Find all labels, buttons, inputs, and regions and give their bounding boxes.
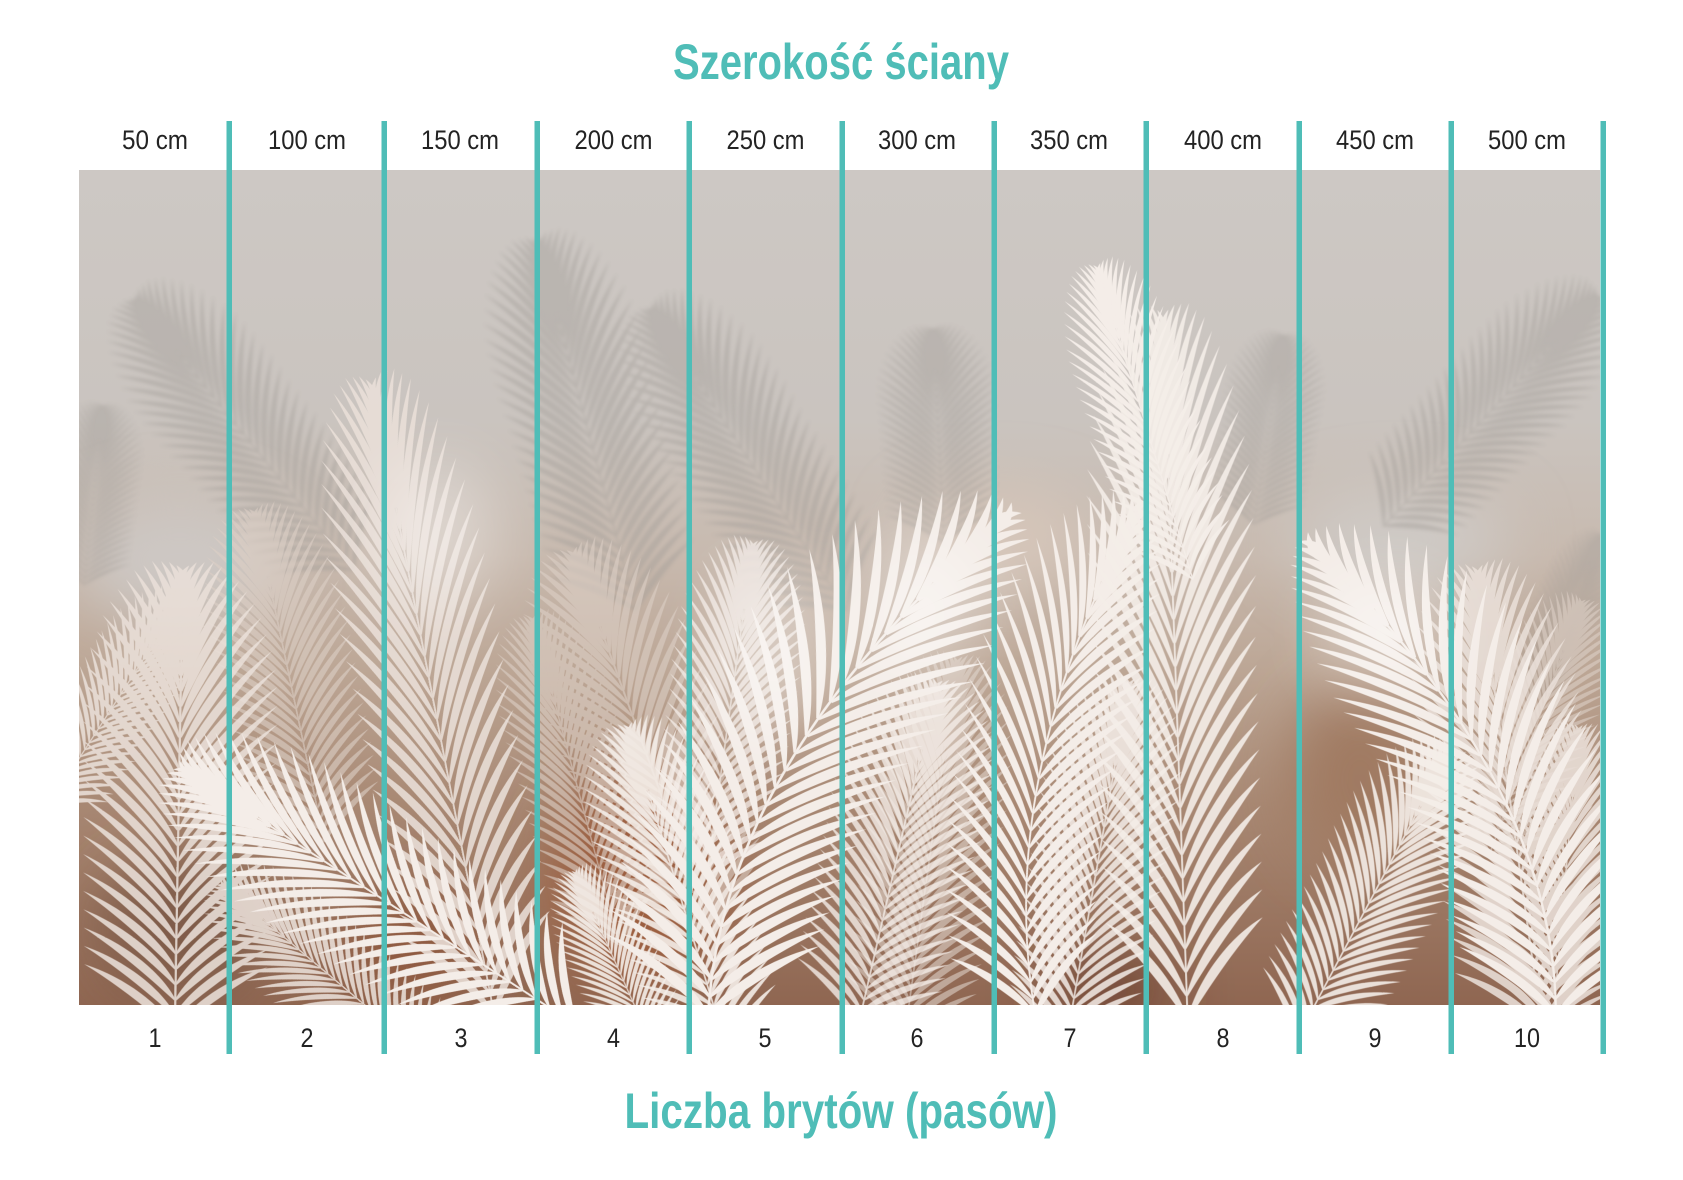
wall width labels: 300 cm — [878, 125, 956, 155]
strip number labels: 5 — [758, 1023, 772, 1053]
strip number labels: 4 — [607, 1023, 620, 1053]
wall width labels — [122, 125, 1566, 155]
wall width labels: 100 cm — [268, 125, 346, 155]
wall width labels: 350 cm — [1030, 125, 1108, 155]
faded middle fronds — [206, 502, 1600, 1005]
background colour patches — [80, 490, 1510, 1020]
strip number labels: 9 — [1368, 1023, 1382, 1053]
wall width labels: 150 cm — [421, 125, 499, 155]
strip number labels: 7 — [1064, 1023, 1076, 1053]
strip number labels: 6 — [910, 1023, 924, 1053]
strip number labels: 8 — [1216, 1023, 1230, 1053]
title: Szerokość ściany — [673, 34, 1009, 90]
soft light highlights — [386, 462, 1449, 742]
wall width labels: 450 cm — [1336, 125, 1414, 155]
grey background fronds — [79, 234, 1600, 676]
wallpaper: palm leaves — [79, 170, 1600, 1005]
wall width labels: 400 cm — [1184, 125, 1262, 155]
foreground back layer fronds — [79, 369, 1600, 1005]
strip number labels — [148, 1023, 1540, 1053]
wall width labels: 50 cm — [122, 125, 188, 155]
wall width labels: 500 cm — [1488, 125, 1566, 155]
strip number labels: 10 — [1514, 1023, 1540, 1053]
bottom heading: Liczba brytów (pasów) — [624, 1083, 1058, 1139]
wall width labels: 200 cm — [574, 125, 652, 155]
wall width labels: 250 cm — [726, 125, 804, 155]
foreground white fronds — [158, 257, 1600, 1005]
strip number labels: 2 — [300, 1023, 314, 1053]
strip number labels: 1 — [148, 1023, 162, 1053]
wallpaper background — [79, 170, 1600, 1005]
strip number labels: 3 — [454, 1023, 468, 1053]
column divider lines — [226, 121, 1606, 1054]
